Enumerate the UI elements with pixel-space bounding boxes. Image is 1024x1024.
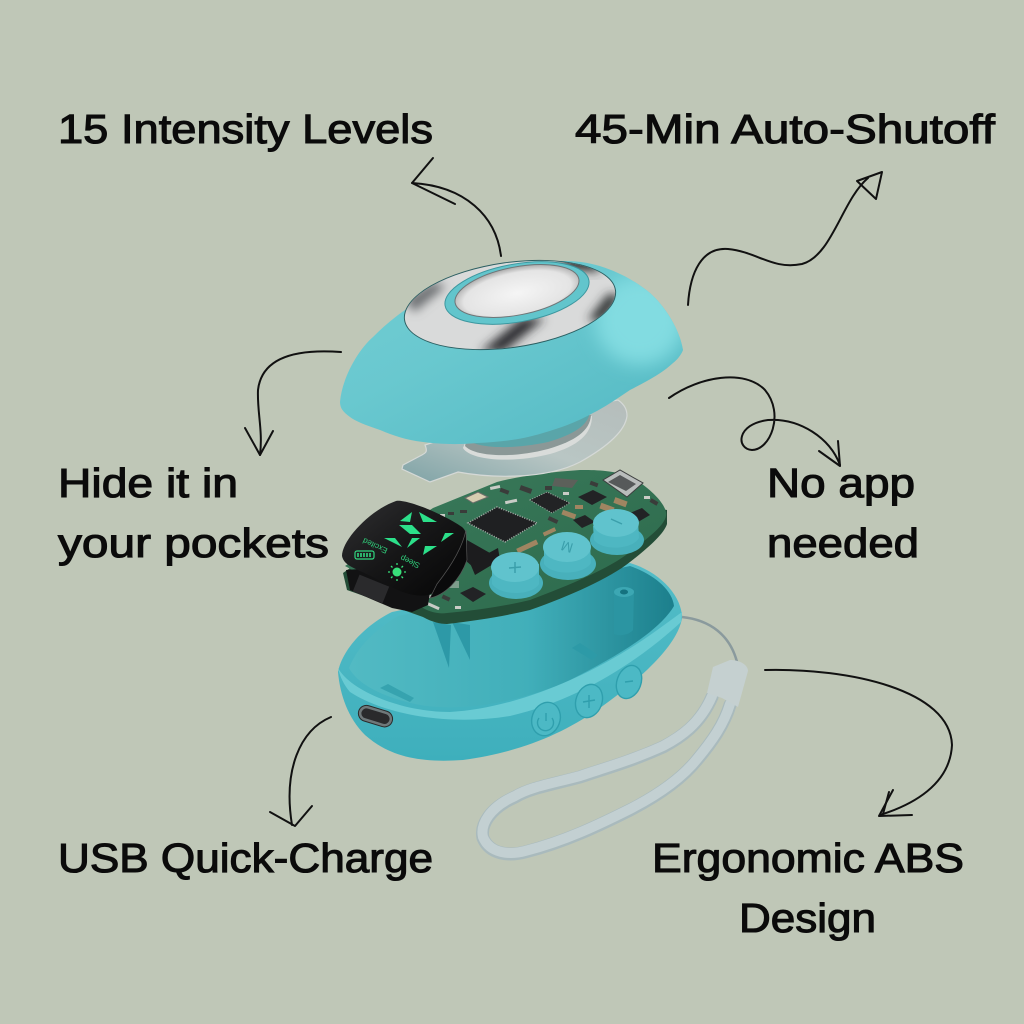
silicone button: M: M [559,538,575,556]
arrow: to 15 intensity levels [412,158,501,256]
display labels [361,536,421,570]
metal ring [404,260,616,350]
display labels: Sleep [399,553,421,570]
heading: No app needed [767,460,919,566]
heading: Ergonomic ABS Design: Design [739,895,876,941]
device: exploded view [338,248,748,854]
arrow: to USB quick-charge [270,717,331,826]
heading: USB Quick-Charge: USB Quick-Charge [58,835,433,881]
arrow: to no app needed [669,377,840,466]
arrow: to 45-min auto-shutoff [688,172,882,305]
silicone button: minus [590,509,644,555]
display labels: Excited [361,536,389,555]
circuit board [342,470,667,624]
heading: Ergonomic ABS Design: Ergonomic ABS [652,835,964,881]
bottom case [338,563,682,761]
silicone button: plus [489,552,543,599]
centre button [451,255,583,327]
heading: No app needed: needed [767,520,919,566]
side buttons [527,662,646,740]
arrow: to ergonomic ABS design [765,670,952,816]
top shell [340,248,685,444]
infographic canvas [57,113,996,941]
arrow: to hide it in your pockets [245,351,341,455]
heading: Ergonomic ABS Design [652,835,964,941]
silicone button: M [540,532,596,580]
heading: Hide it in your pockets: your pockets [58,520,329,566]
inner post and ribs [380,587,634,702]
heading: No app needed: No app [767,460,915,506]
wrist strap [482,617,748,854]
USB-C port [356,703,395,729]
heading: 45-Min Auto-Shutoff: 45-Min Auto-Shutoff [575,106,996,152]
heading: Hide it in your pockets [58,460,329,566]
seven-segment digits [384,512,454,555]
heading: 15 Intensity Levels: 15 Intensity Levels [58,106,433,152]
PCB components [425,470,658,610]
sun icon [388,563,406,581]
battery indicator [355,551,374,559]
heading: Hide it in your pockets: Hide it in [58,460,238,506]
metal plate and disc [402,400,627,482]
display module [342,501,467,612]
